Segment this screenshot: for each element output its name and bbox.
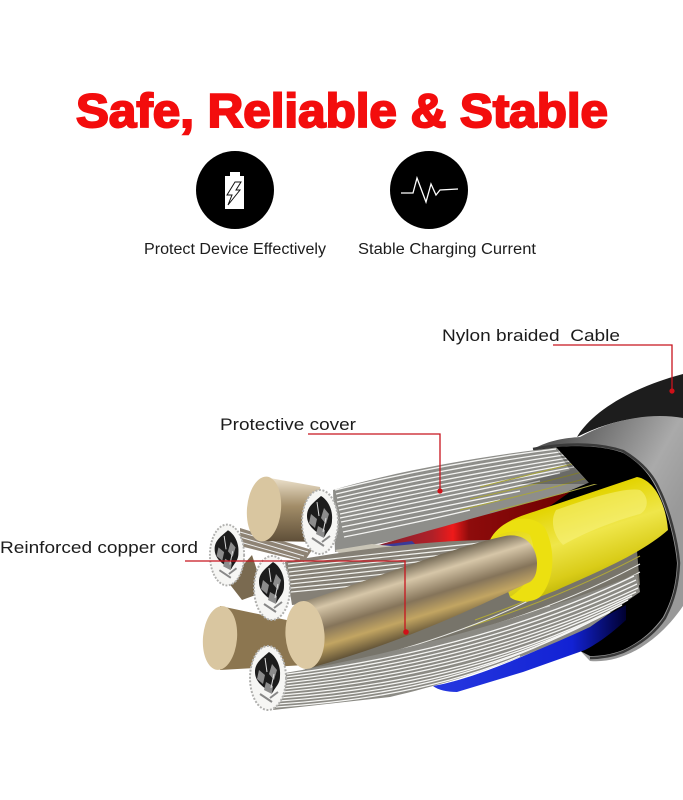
strand end: left bbox=[210, 525, 244, 585]
middle strand bundle bbox=[285, 540, 495, 605]
conductor face: center bbox=[283, 600, 327, 670]
upper-left strand lower body bbox=[228, 555, 264, 600]
feature: protect device bbox=[144, 151, 326, 258]
title: Safe, Reliable & Stable bbox=[76, 84, 608, 137]
icon: battery bbox=[196, 151, 274, 229]
braided jacket bbox=[577, 374, 683, 437]
sheath rim bbox=[533, 445, 679, 658]
label: protect device: Protect Device Effectively bbox=[144, 241, 326, 258]
conductor face: top left bbox=[244, 475, 284, 543]
strand end: bottom bbox=[250, 646, 286, 710]
label: stable current: Stable Charging Current bbox=[358, 241, 537, 258]
cable illustration bbox=[200, 374, 683, 710]
strand end: center bbox=[254, 556, 290, 620]
sheath mouth bbox=[520, 446, 677, 656]
gray sheath bbox=[533, 416, 683, 661]
red core bbox=[368, 492, 570, 550]
bottom-left gold conductor bbox=[220, 606, 305, 670]
insulation collar bbox=[490, 519, 552, 602]
blue core bbox=[433, 605, 626, 692]
strand end: top bbox=[302, 490, 338, 554]
callout: protective cover: Protective cover bbox=[220, 415, 356, 434]
callout: reinforced copper cord: Reinforced copper cord bbox=[0, 538, 198, 557]
icon: pulse bbox=[390, 151, 468, 229]
main gold conductor bbox=[303, 535, 537, 668]
upper-left small strand bbox=[240, 528, 312, 562]
lower strand bundle bbox=[273, 574, 640, 710]
feature: stable current bbox=[358, 151, 537, 258]
yellow insulation bbox=[490, 477, 668, 602]
pale strand junction bbox=[335, 544, 420, 558]
callout: nylon braided cable bbox=[442, 326, 675, 394]
blue sliver bbox=[368, 541, 420, 550]
callout: nylon braided cable: Nylon braided Cable bbox=[442, 326, 620, 345]
callout: reinforced copper cord bbox=[0, 538, 409, 635]
strands behind main conductor bbox=[298, 540, 640, 680]
conductor face: bottom left bbox=[200, 605, 240, 671]
top-left gold conductor bbox=[264, 477, 325, 542]
mouth shadow over top strands bbox=[556, 446, 657, 490]
callout: protective cover bbox=[220, 415, 443, 494]
top strand bundle bbox=[333, 447, 616, 552]
insulation highlight bbox=[553, 490, 647, 545]
